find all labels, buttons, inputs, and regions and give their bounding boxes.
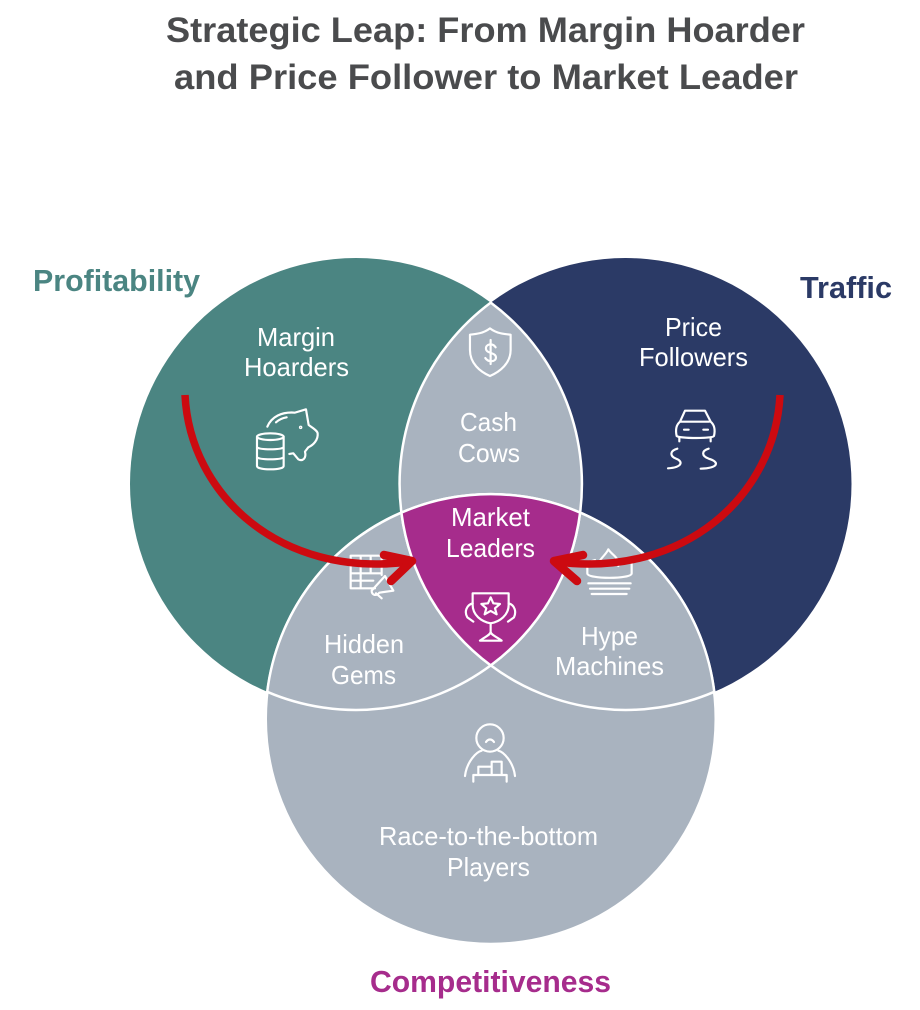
label: competitiveness: Competitiveness (370, 964, 611, 999)
text: race-to-the-bottom players (379, 821, 598, 882)
overlap: market leaders (401, 494, 580, 665)
circle: traffic (400, 258, 852, 710)
text: hidden gems: Gems (331, 660, 396, 690)
icon: piggy bank and coins (257, 409, 318, 469)
icon: billboard with megaphone (351, 556, 393, 598)
title: and Price Follower to Market Leader (174, 58, 798, 97)
text: market leaders (446, 502, 535, 563)
text: hidden gems (324, 629, 404, 690)
arrow: price followers to market leaders (554, 395, 780, 581)
icon: car on winding road (668, 411, 716, 469)
circle: profitability (130, 258, 582, 710)
text: market leaders: Market (451, 502, 531, 532)
text: hype machines (555, 621, 664, 681)
text: margin hoarders: Hoarders (244, 352, 349, 382)
circle: competitiveness (266, 494, 716, 944)
label: profitability: Profitability (33, 263, 201, 298)
text: margin hoarders: Margin (257, 322, 335, 352)
text: price followers (639, 312, 748, 372)
text: cash cows: Cows (458, 438, 520, 468)
text: market leaders: Leaders (446, 533, 535, 563)
title: Strategic Leap: From Margin Hoarder (166, 11, 805, 50)
text: hidden gems: Hidden (324, 629, 404, 659)
overlap: cash cows (400, 303, 582, 513)
text: price followers: Followers (639, 342, 748, 372)
label: traffic: Traffic (800, 270, 892, 305)
title (166, 11, 805, 97)
text: margin hoarders (244, 322, 349, 382)
icon: person with small boxes (465, 724, 515, 782)
overlap: hidden gems (267, 513, 491, 710)
icon: shield with dollar (470, 328, 511, 376)
text: cash cows (458, 407, 520, 468)
icon: fire basket (587, 549, 632, 594)
arrow: margin hoarders to market leaders (185, 395, 412, 581)
text: race-to-the-bottom players: Players (447, 852, 530, 882)
text: hype machines: Machines (555, 651, 664, 681)
text: race-to-the-bottom players: Race-to-the-bottom (379, 821, 598, 851)
text: price followers: Price (665, 312, 722, 342)
text: cash cows: Cash (460, 407, 517, 437)
icon: trophy with star (466, 593, 515, 641)
overlap: hype machines (491, 513, 714, 710)
text: hype machines: Hype (581, 621, 638, 651)
